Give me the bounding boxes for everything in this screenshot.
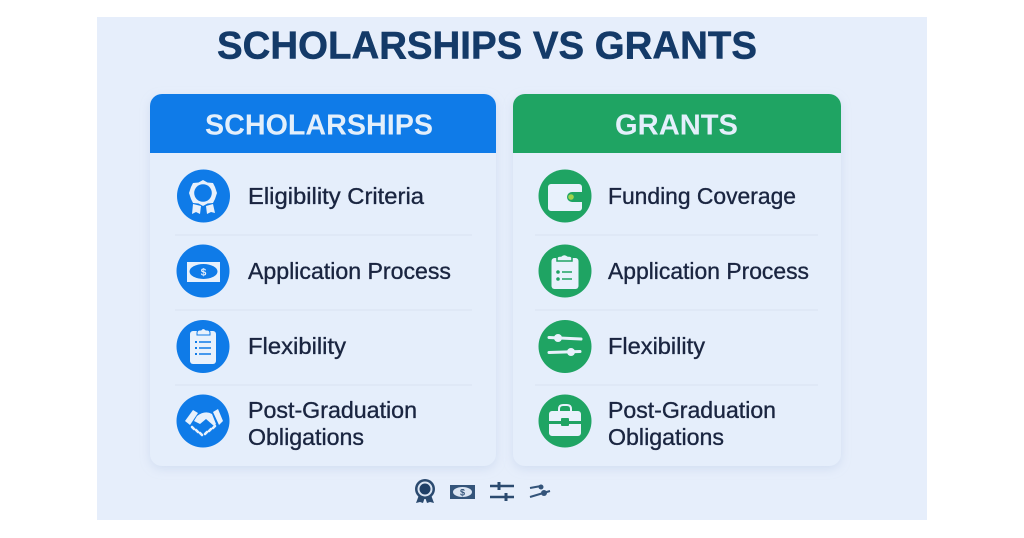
row: post-graduation obligations [538,394,776,450]
label: Application Process [248,258,451,284]
panel: grants [513,94,841,466]
label: Post-Graduation [608,397,776,423]
icon: sliders [490,482,514,501]
label [608,397,776,450]
label: Application Process [608,258,809,284]
icon: banknote [176,244,230,298]
icon: small sliders [530,484,550,497]
icon: clipboard list [176,320,230,373]
panel: scholarships [150,94,496,466]
label: Post-Graduation [248,397,417,423]
card body [513,94,841,466]
scholarships header: SCHOLARSHIPS [205,110,433,142]
icon: briefcase [538,394,592,448]
icon: award ribbon [177,170,230,222]
row: application process [538,244,809,298]
icon: clipboard [538,244,592,298]
icon: banknote: $ [201,268,207,278]
background panel [97,17,927,520]
card body [150,94,496,466]
icon: sliders [538,320,592,373]
icon: wallet [538,170,592,222]
scholarships header [150,94,496,153]
label [248,397,417,450]
label: Eligibility Criteria [248,183,424,209]
title: SCHOLARSHIPS VS GRANTS [217,24,757,68]
row: funding coverage [538,170,796,222]
row: post-graduation obligations [176,394,417,450]
row: flexibility [176,320,347,373]
label: Flexibility [608,333,706,359]
label: Obligations [608,424,724,450]
grants header: GRANTS [615,110,738,142]
grants header [513,94,841,153]
icon: banknote: $ [460,488,465,498]
icon: handshake [176,394,230,448]
bottom icon row [415,479,550,503]
row: eligibility criteria [177,170,424,222]
label: Obligations [248,424,364,450]
row: flexibility [538,320,706,373]
label: Flexibility [248,333,347,359]
row: application process [176,244,451,298]
icon: award [415,479,435,503]
label: Funding Coverage [608,183,796,209]
